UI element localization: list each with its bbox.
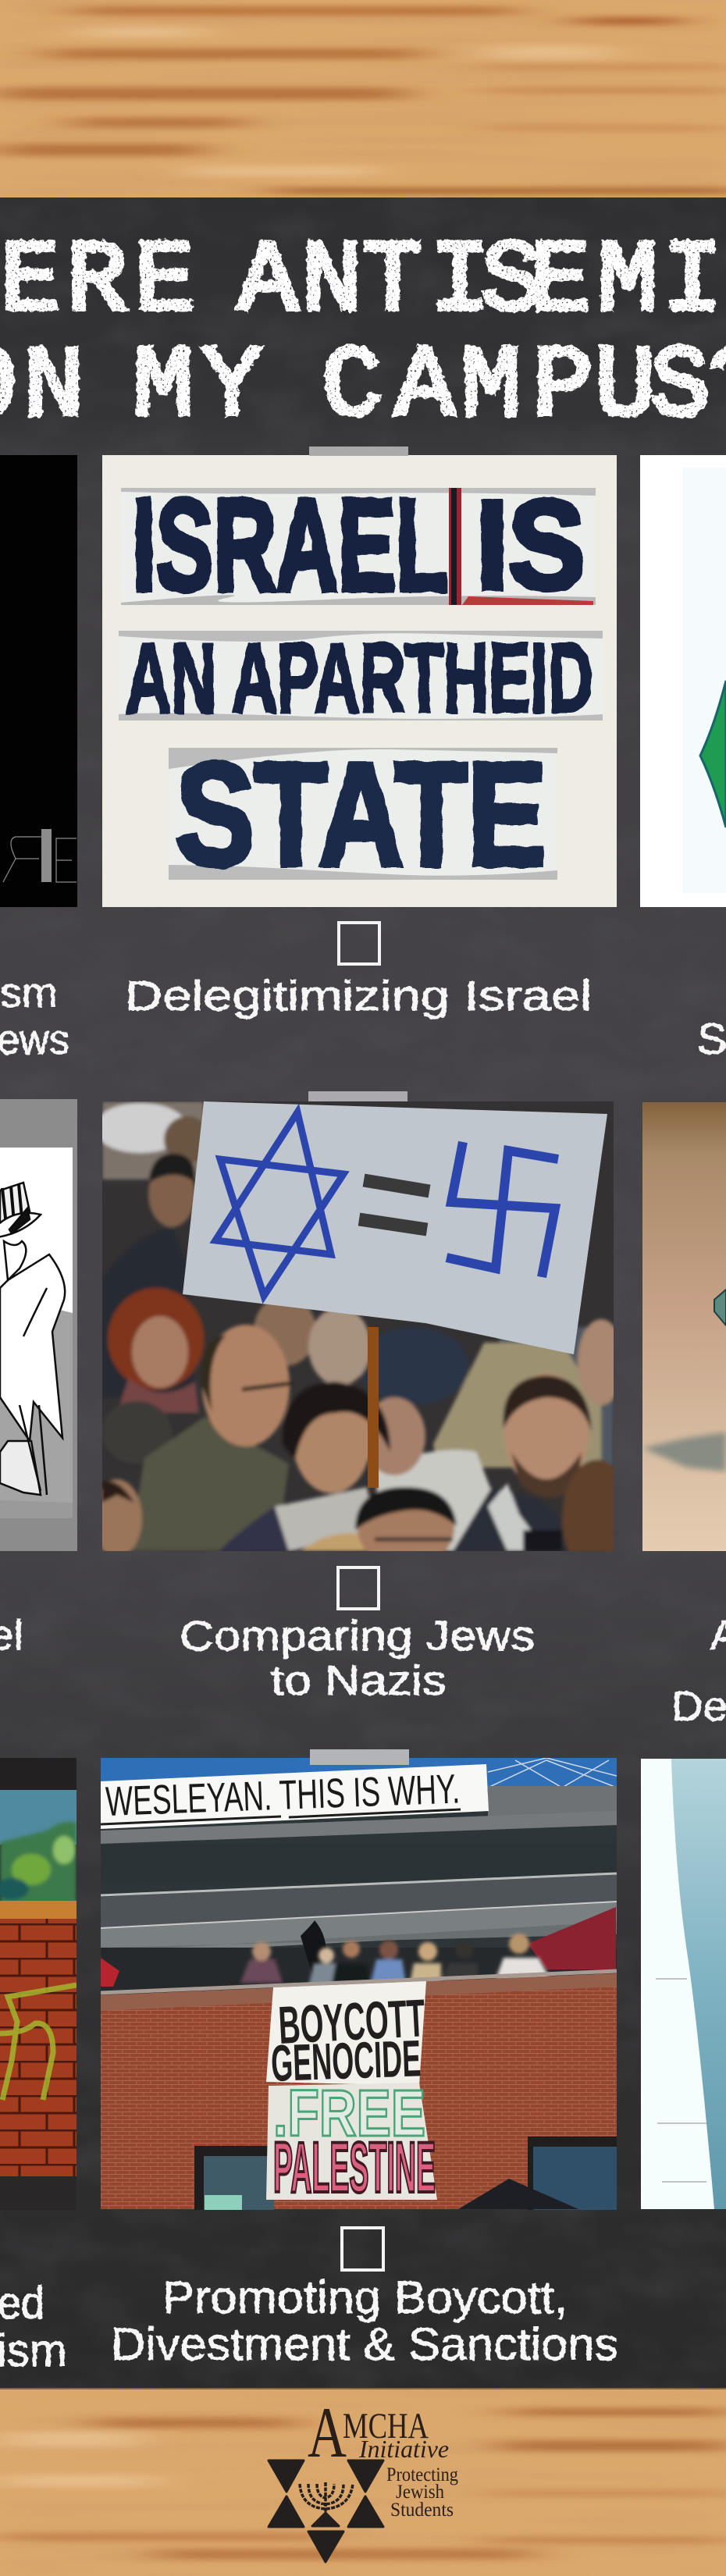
banner strip: Israel is: IS xyxy=(476,475,585,616)
photo: right column row 2, skin xyxy=(642,1102,726,1551)
banner text: boycott: BOYCOTT xyxy=(277,1988,427,2055)
lattice xyxy=(488,1758,617,1788)
logo: wordmark: Students xyxy=(390,2500,454,2521)
title xyxy=(0,226,726,446)
tent xyxy=(458,2179,578,2209)
photo: Wesleyan building with boycott banner xyxy=(101,1758,617,2211)
photo: protest crowd with sign xyxy=(102,1101,614,1551)
labels: row 2 xyxy=(0,1612,726,1730)
sky xyxy=(101,1758,617,1789)
top banner: Wesleyan: WESLEYAN. THIS IS WHY. xyxy=(105,1766,461,1825)
logo: wordmark: Protecting xyxy=(386,2464,458,2485)
labels: row 1 xyxy=(0,970,726,1063)
tape: row 3 xyxy=(310,1749,409,1765)
photo: Wesleyan building with boycott banner: PALESTINE xyxy=(273,2128,436,2208)
logo: wordmark xyxy=(308,2393,458,2521)
labels: row 3 xyxy=(0,2272,618,2376)
tape: row 2 xyxy=(308,1091,407,1101)
wood shelf: top xyxy=(0,0,726,197)
brick wall xyxy=(101,1973,617,2209)
sign pole xyxy=(368,1327,379,1488)
photo: left column row 2, cartoon xyxy=(0,1099,77,1551)
photo: banner reading Israel is an apartheid state xyxy=(102,455,617,907)
logo: wordmark: MCHA xyxy=(343,2406,429,2446)
logo: wordmark: Initiative xyxy=(358,2435,449,2463)
people on balcony xyxy=(240,1934,550,1987)
upper floors xyxy=(101,1844,617,1883)
banner text: genocide: GENOCIDE xyxy=(270,2029,422,2092)
sign xyxy=(183,1101,607,1354)
hanging banner xyxy=(266,1981,437,2208)
photographer watermark xyxy=(3,829,77,882)
railing xyxy=(101,1971,617,1993)
photo: left column row 1 xyxy=(0,455,77,907)
banner strip: an apartheid xyxy=(119,631,603,720)
logo: AMCHA Initiative xyxy=(269,2393,458,2562)
label: second line: to Nazis xyxy=(271,1657,447,1704)
sign: second symbol xyxy=(447,1142,558,1277)
photo: left column row 3, graffiti on brick wall xyxy=(0,1758,77,2210)
banner text: free: .FREE xyxy=(273,2076,425,2150)
label: Promoting Boycott: Promoting Boycott, xyxy=(162,2272,568,2323)
label: Comparing Jews to Nazis: Comparing Jews xyxy=(180,1613,535,1660)
top banner: Wesleyan xyxy=(101,1764,489,1829)
umbrellas xyxy=(528,1907,616,1969)
logo: wordmark: A xyxy=(308,2393,347,2472)
photo: right column row 1, green map xyxy=(640,455,726,907)
logo: star of triangles xyxy=(269,2460,383,2562)
tape: row 1 xyxy=(309,447,408,456)
siding xyxy=(488,1786,617,1819)
label: right column fragment line 2: De xyxy=(671,1683,726,1730)
label: Divestment and Sanctions: Divestment & Sanctions xyxy=(111,2319,618,2370)
sign: equals xyxy=(359,1180,429,1229)
label: Delegitimizing Israel: Delegitimizing Israel xyxy=(125,973,592,1019)
graffiti xyxy=(0,1985,77,2100)
checkbox: delegitimizing Israel xyxy=(339,923,379,964)
checkbox: promoting boycott xyxy=(342,2228,383,2270)
checkbox: comparing Jews to Nazis xyxy=(338,1567,379,1609)
logo: wordmark: Jewish xyxy=(396,2482,444,2503)
figure: coat and hat xyxy=(0,1183,65,1495)
logo: menorah xyxy=(300,2482,353,2512)
photo: right column row 3, curtain xyxy=(641,1759,726,2209)
crowd xyxy=(102,1101,614,1551)
sign: star xyxy=(215,1112,343,1296)
banner strip: Israel is: ISRAEL xyxy=(132,471,448,618)
banner strip: state xyxy=(169,748,557,880)
banner strip: state: STATE xyxy=(176,732,546,896)
wood shelf: bottom xyxy=(0,2388,726,2576)
label: left column fragment: sm xyxy=(0,970,58,1016)
windows xyxy=(194,2146,272,2210)
